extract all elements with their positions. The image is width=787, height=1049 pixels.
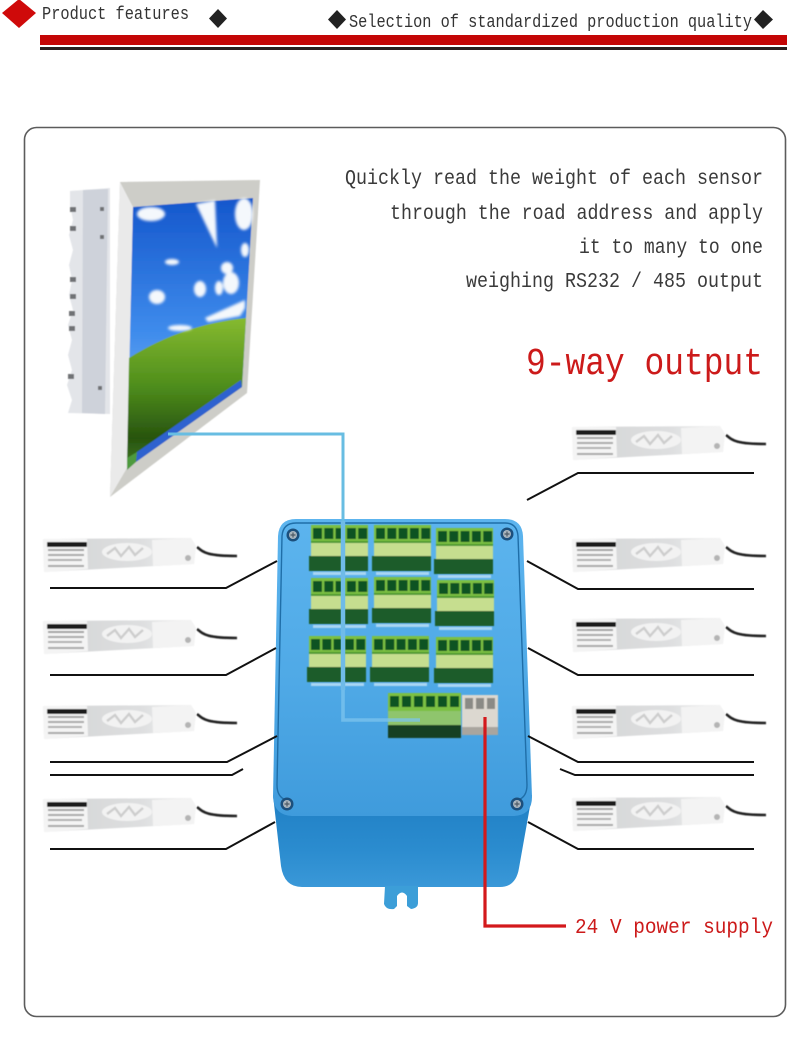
heading: product features: Product features [42,5,189,25]
icon: black diamond after subtitle [754,10,773,29]
computer screen taskbar [136,380,242,462]
text block: description: it to many to one [579,237,763,260]
text block: description [345,168,763,294]
computer screen sky [127,198,253,468]
enclosure lid [273,519,532,816]
icon: black diamond before subtitle [328,10,346,29]
computer screen grass hill [127,318,246,468]
icon: red diamond [2,0,36,28]
white power connector [462,695,498,735]
screws [280,528,524,810]
header red bar [40,35,787,45]
arrow: blue RS485 cable to computer [168,434,420,720]
wires left column [50,561,277,849]
sensors left column [43,538,237,832]
label: 24 V power supply: 24 V power supply [575,917,773,940]
enclosure: blue terminal box [273,519,532,909]
computer front bezel [110,180,260,497]
lid groove [277,523,527,800]
header black rule [40,47,787,50]
computer rear housing [67,188,110,414]
enclosure body [273,795,532,887]
mounting tab [384,886,418,909]
sensors right column [572,426,766,831]
computer screen clouds [137,198,253,331]
icon: black diamond left [209,9,227,28]
rear housing connector studs [68,207,104,390]
power terminal block [388,693,461,738]
arrow: red power cable [485,717,566,926]
wires right column [527,473,754,849]
icon: industrial panel computer [67,180,260,497]
terminal block grid [307,525,498,738]
